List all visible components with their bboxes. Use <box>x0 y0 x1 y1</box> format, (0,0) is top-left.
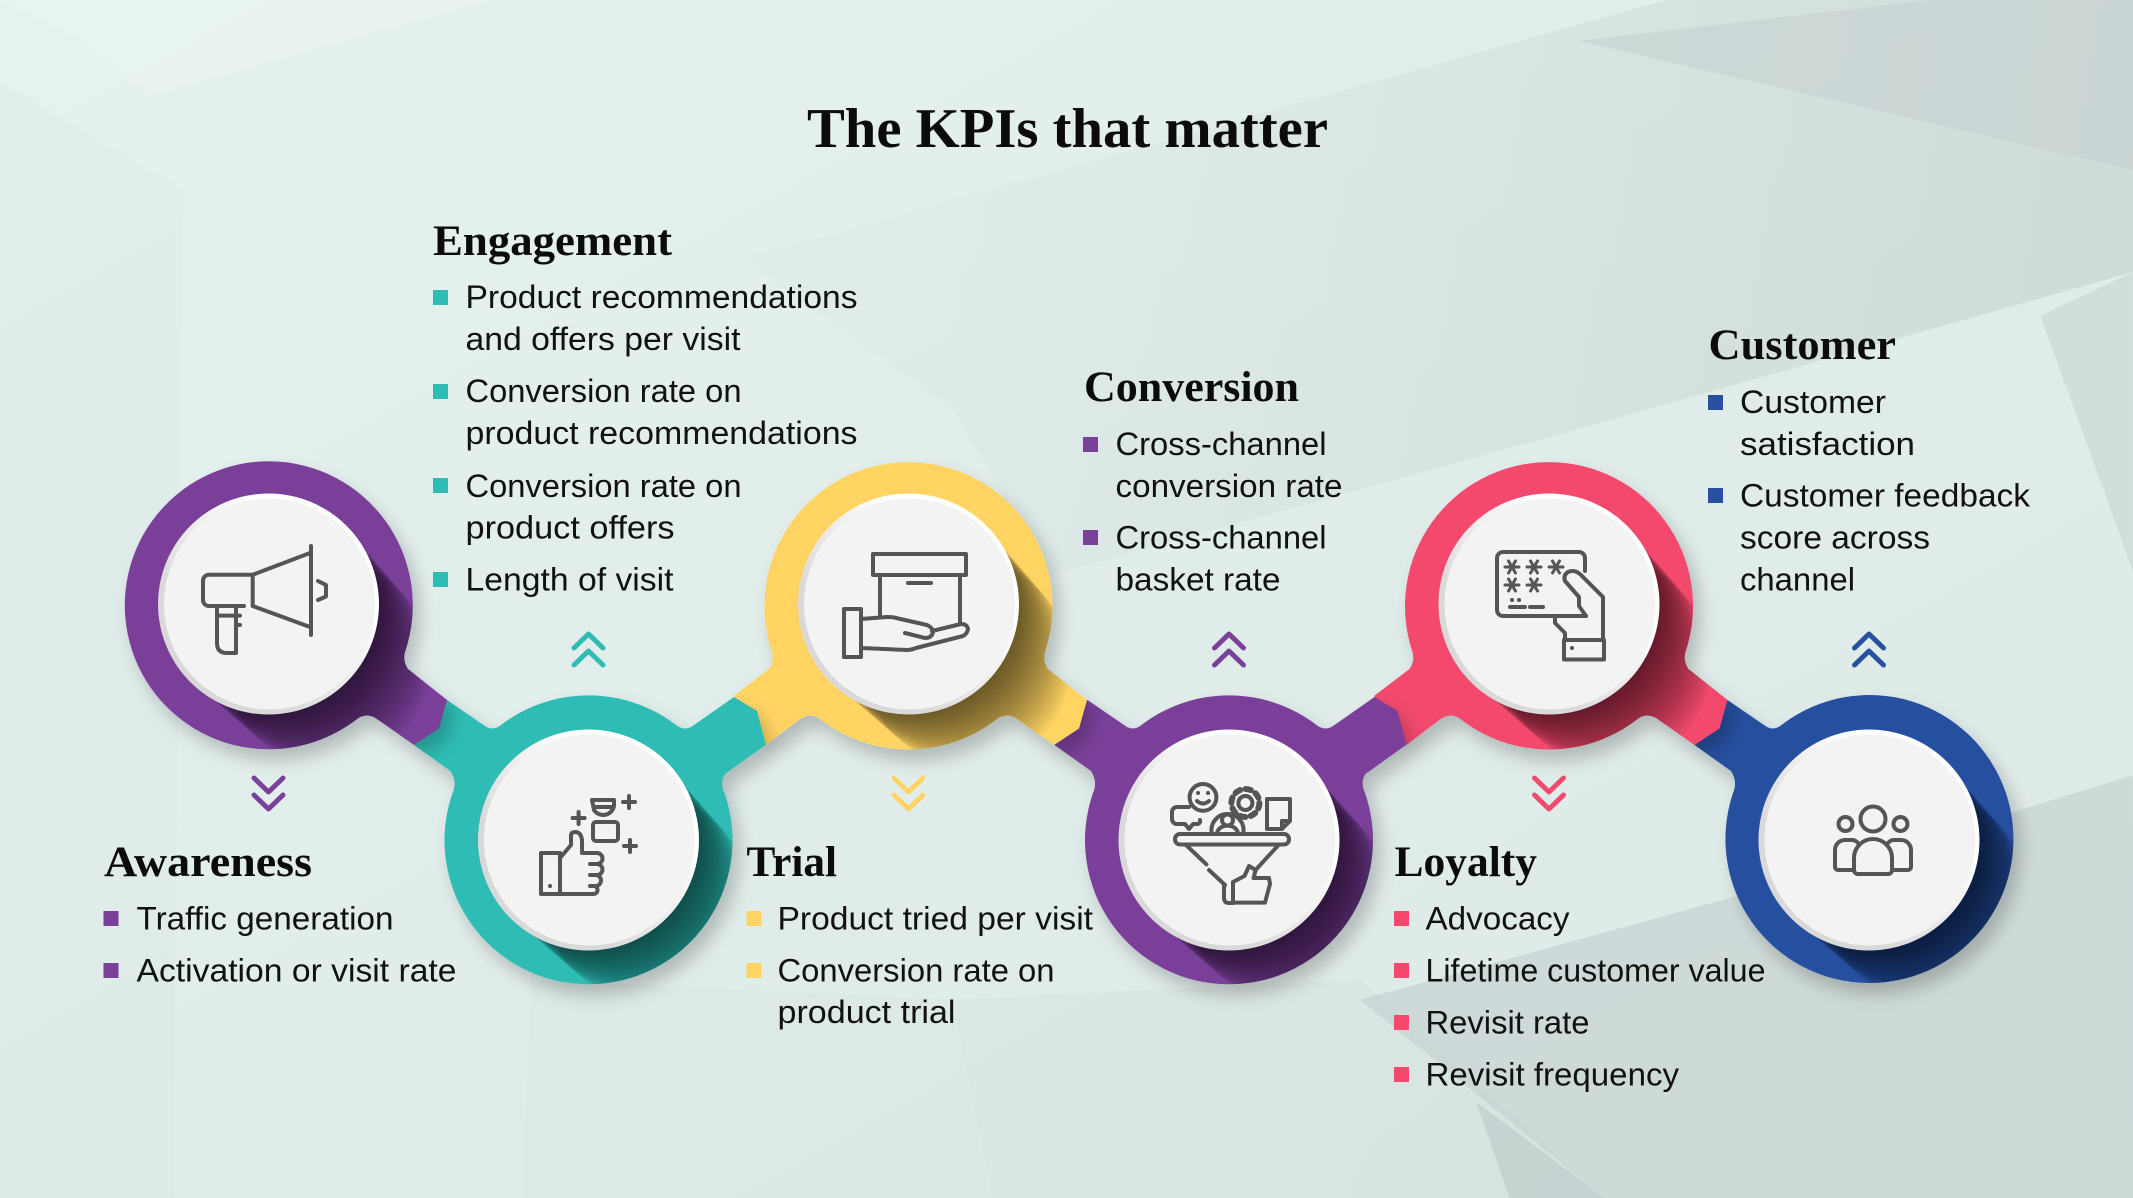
text block: engagement: Conversion rate on <box>466 468 742 504</box>
icon: box on hand <box>844 554 968 657</box>
text block: customer <box>1708 322 2031 598</box>
text block: conversion <box>1083 364 1342 598</box>
text block: customer: satisfaction <box>1740 426 1915 462</box>
icon: card in hand <box>1497 552 1604 660</box>
text block: loyalty: Revisit frequency <box>1426 1056 1679 1092</box>
arrow: loyalty down <box>1534 778 1564 809</box>
text block: trial: Trial <box>746 839 837 886</box>
text block: awareness: Awareness <box>104 839 312 886</box>
text block: customer: Customer <box>1740 384 1886 420</box>
node: engagement ring <box>414 695 766 1002</box>
text block: engagement: Conversion rate on <box>466 373 742 409</box>
text block: customer: score across <box>1740 520 1930 556</box>
text block: awareness: Traffic generation <box>136 900 394 936</box>
node: awareness ring <box>125 461 447 766</box>
text block: engagement: Length of visit <box>466 562 674 598</box>
title: The KPIs that matter <box>807 98 1328 160</box>
text block: awareness: Activation or visit rate <box>136 952 456 988</box>
icon: funnel with thumb <box>1172 784 1290 903</box>
text block: conversion: Cross-channel <box>1116 520 1326 556</box>
icon: thumbs up with person <box>541 796 636 894</box>
icon: megaphone <box>203 546 326 653</box>
text block: conversion: Conversion <box>1084 364 1299 411</box>
text block: loyalty <box>1394 839 1766 1092</box>
text block: loyalty: Loyalty <box>1394 839 1537 886</box>
arrow: engagement up <box>574 634 603 665</box>
text block: customer: Customer <box>1708 322 1896 369</box>
text block: conversion: Cross-channel <box>1116 426 1326 462</box>
text block: customer: channel <box>1740 562 1855 598</box>
text block: loyalty: Lifetime customer value <box>1426 952 1766 988</box>
node: trial ring <box>734 462 1087 766</box>
text block: trial <box>746 839 1093 1030</box>
node: conversion ring <box>1054 695 1406 1002</box>
text block: loyalty: Revisit rate <box>1426 1004 1590 1040</box>
node: loyalty ring <box>1374 462 1728 766</box>
text block: conversion: basket rate <box>1116 562 1280 598</box>
text block: awareness <box>104 839 456 988</box>
text block: engagement: product recommendations <box>466 415 858 451</box>
text block: trial: product trial <box>778 994 956 1030</box>
text block: trial: Conversion rate on <box>778 952 1054 988</box>
text block: engagement: Engagement <box>433 218 673 265</box>
arrow: customer up <box>1854 634 1884 665</box>
text block: engagement: Product recommendations <box>466 279 858 315</box>
text block: customer: Customer feedback <box>1740 478 2031 514</box>
text block: engagement: product offers <box>466 510 674 546</box>
text block: loyalty: Advocacy <box>1426 900 1570 936</box>
arrow: conversion up <box>1214 634 1244 665</box>
text block: conversion: conversion rate <box>1116 468 1342 504</box>
node: customer ring <box>1694 695 2031 1002</box>
arrow: trial down <box>894 778 923 809</box>
arrow: awareness down <box>254 778 283 809</box>
icon: group of people <box>1835 806 1911 874</box>
text block: engagement <box>433 218 858 598</box>
text block: engagement: and offers per visit <box>466 321 741 357</box>
text block: trial: Product tried per visit <box>778 900 1093 936</box>
